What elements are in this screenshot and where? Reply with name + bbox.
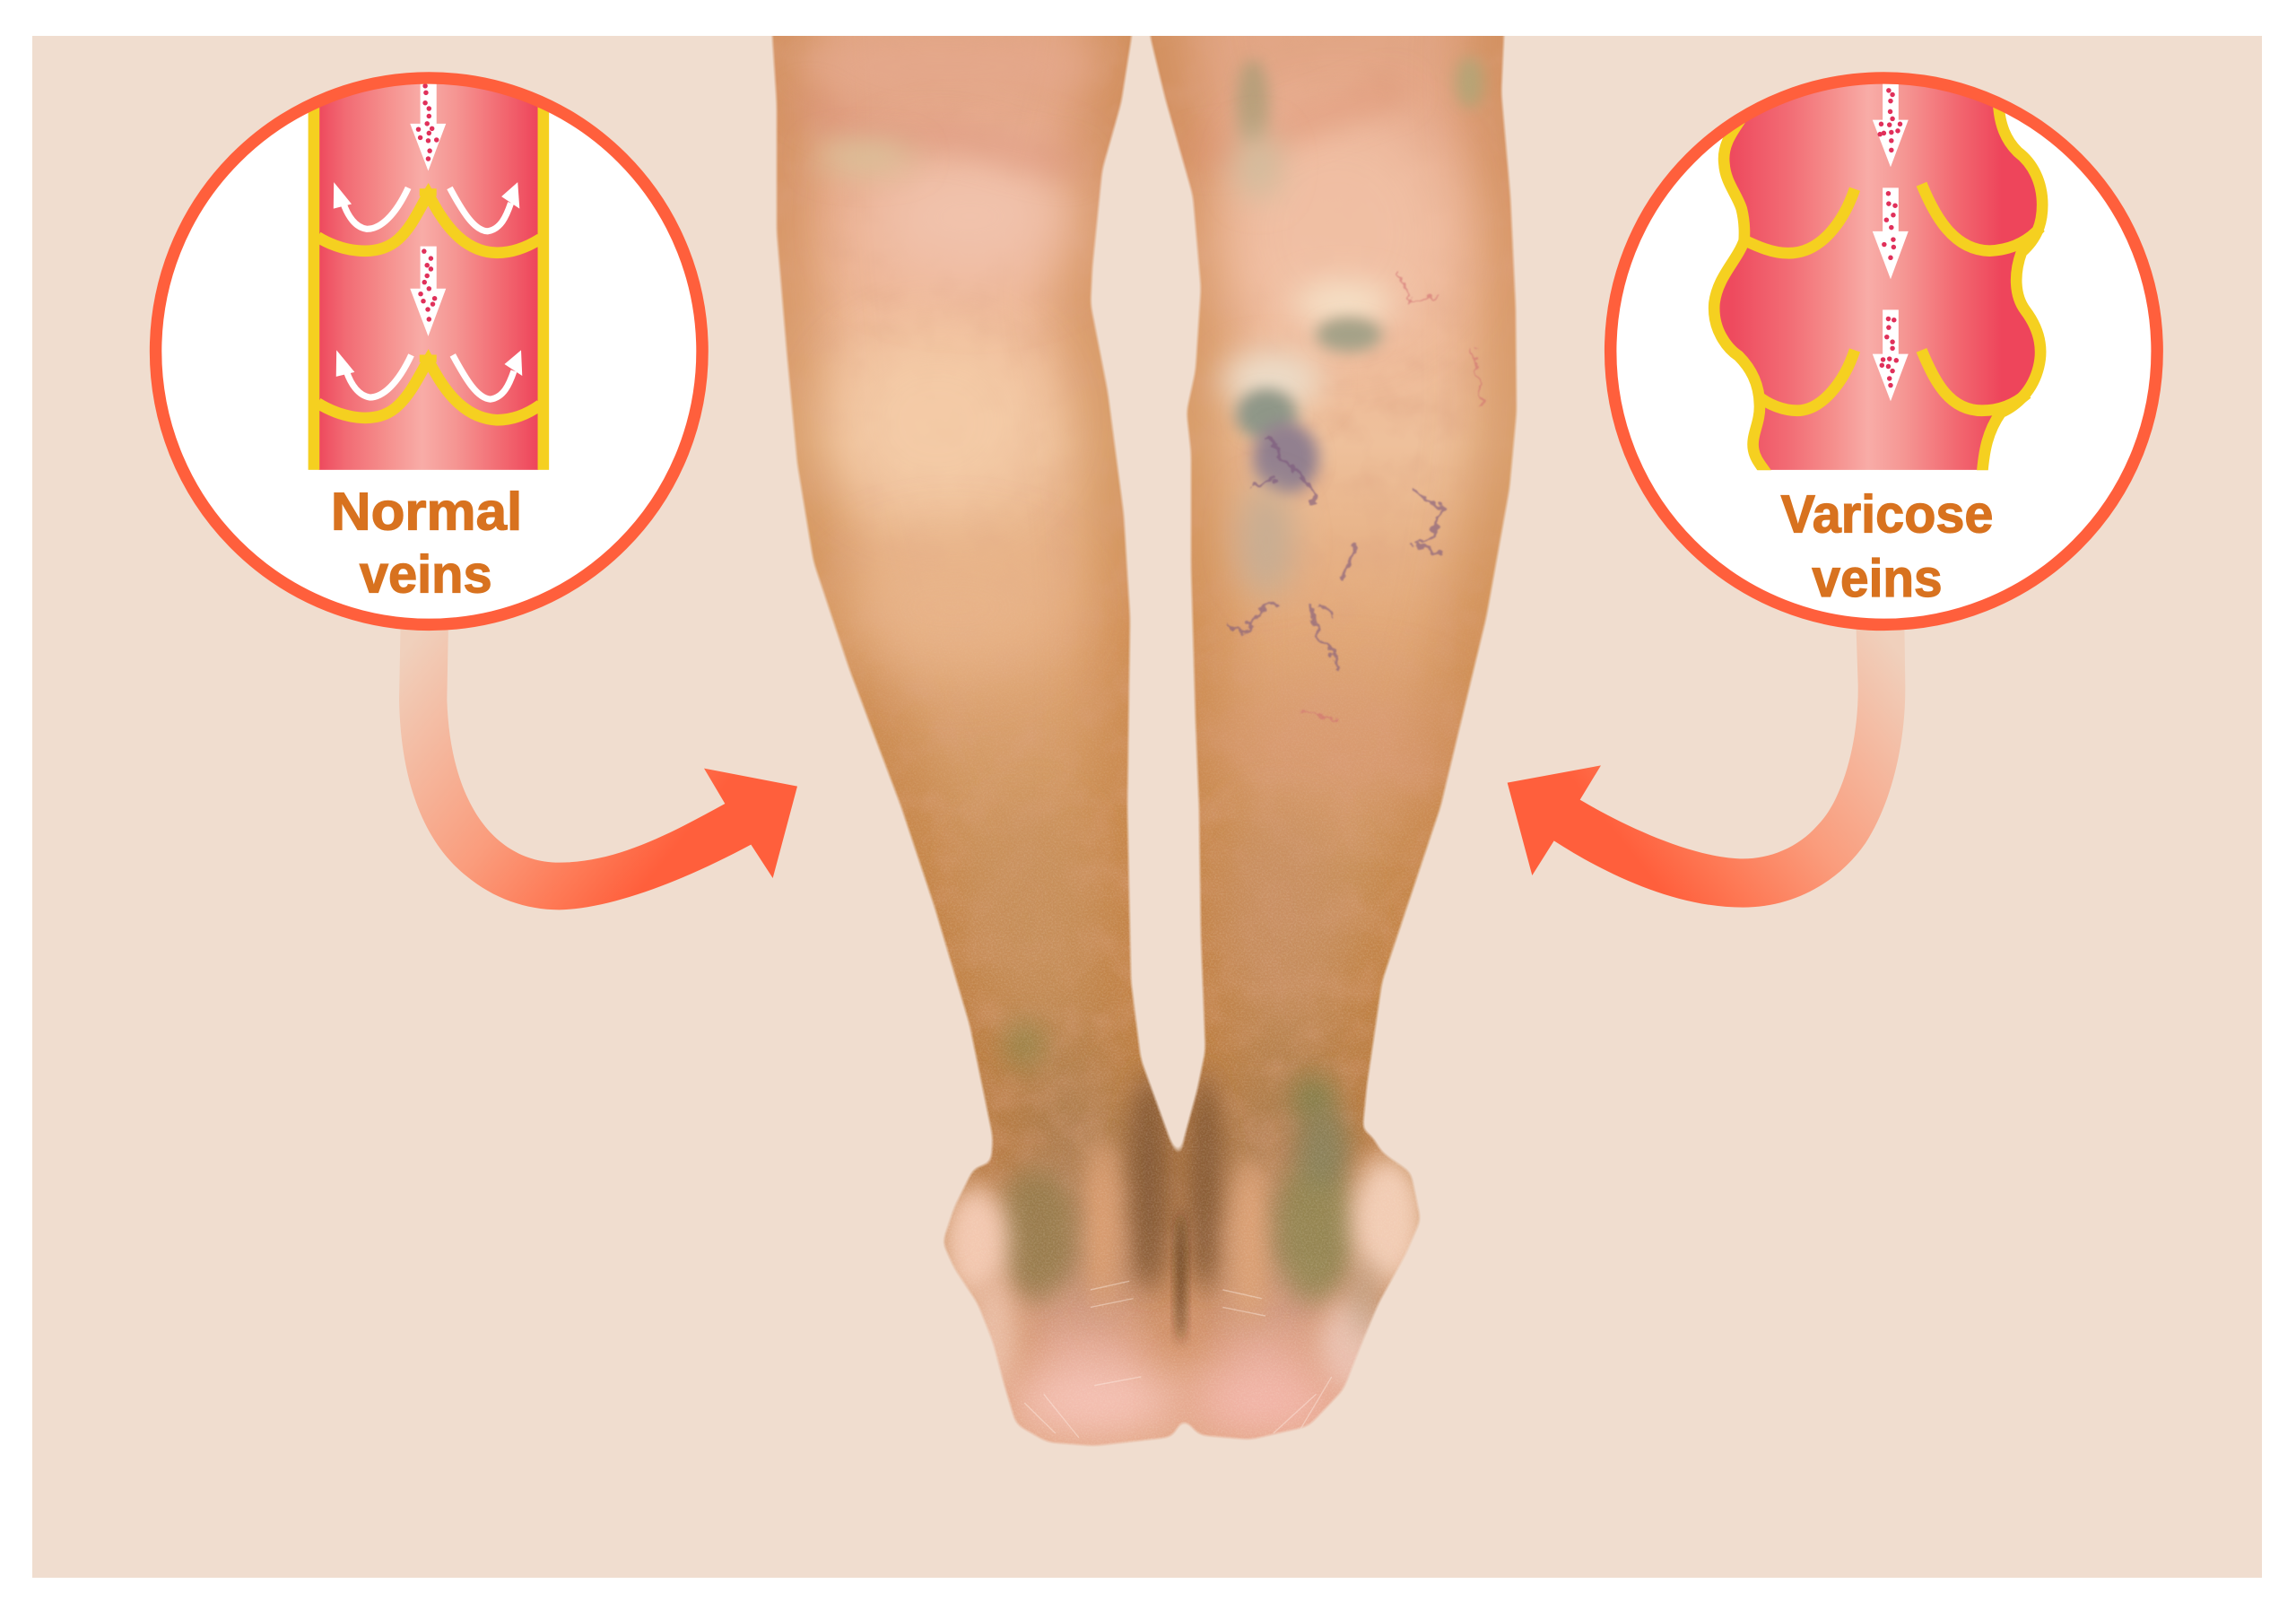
upper legs and varicose marks — [795, 41, 1484, 814]
label: Normal veins: veins — [360, 546, 492, 605]
heel skin creases — [1024, 1281, 1332, 1438]
photo: legs seen from behind — [771, 36, 1518, 1447]
valves — [317, 192, 540, 420]
blood flow arrows — [410, 76, 446, 336]
varicose vein diagram — [1714, 69, 2042, 485]
label: Varicose veins: Varicose — [1781, 486, 1993, 544]
blood cells — [1877, 88, 1902, 387]
label: Normal veins: Normal — [331, 483, 522, 541]
ring: varicose veins — [1611, 78, 2157, 624]
label: Varicose veins — [1781, 486, 1993, 608]
arrow: normal veins callout to left leg — [399, 622, 797, 910]
skin texture on the lower legs — [868, 675, 1465, 1444]
ring: normal veins — [156, 78, 702, 624]
blood flow arrows — [1873, 76, 1909, 401]
failed valves — [1745, 184, 2040, 411]
blood cells — [416, 83, 439, 322]
panel: normal veins circle — [156, 69, 702, 624]
normal vein diagram — [309, 69, 549, 470]
label: Normal veins — [331, 483, 522, 605]
veins — [1225, 273, 1483, 721]
label: Varicose veins: veins — [1812, 550, 1943, 608]
curved return arrows — [334, 182, 522, 399]
vein wall — [1714, 100, 2042, 476]
ankles and heels — [943, 812, 1425, 1438]
arrow: varicose veins callout to right leg — [1508, 622, 1905, 908]
panel: varicose veins circle — [1611, 69, 2157, 624]
